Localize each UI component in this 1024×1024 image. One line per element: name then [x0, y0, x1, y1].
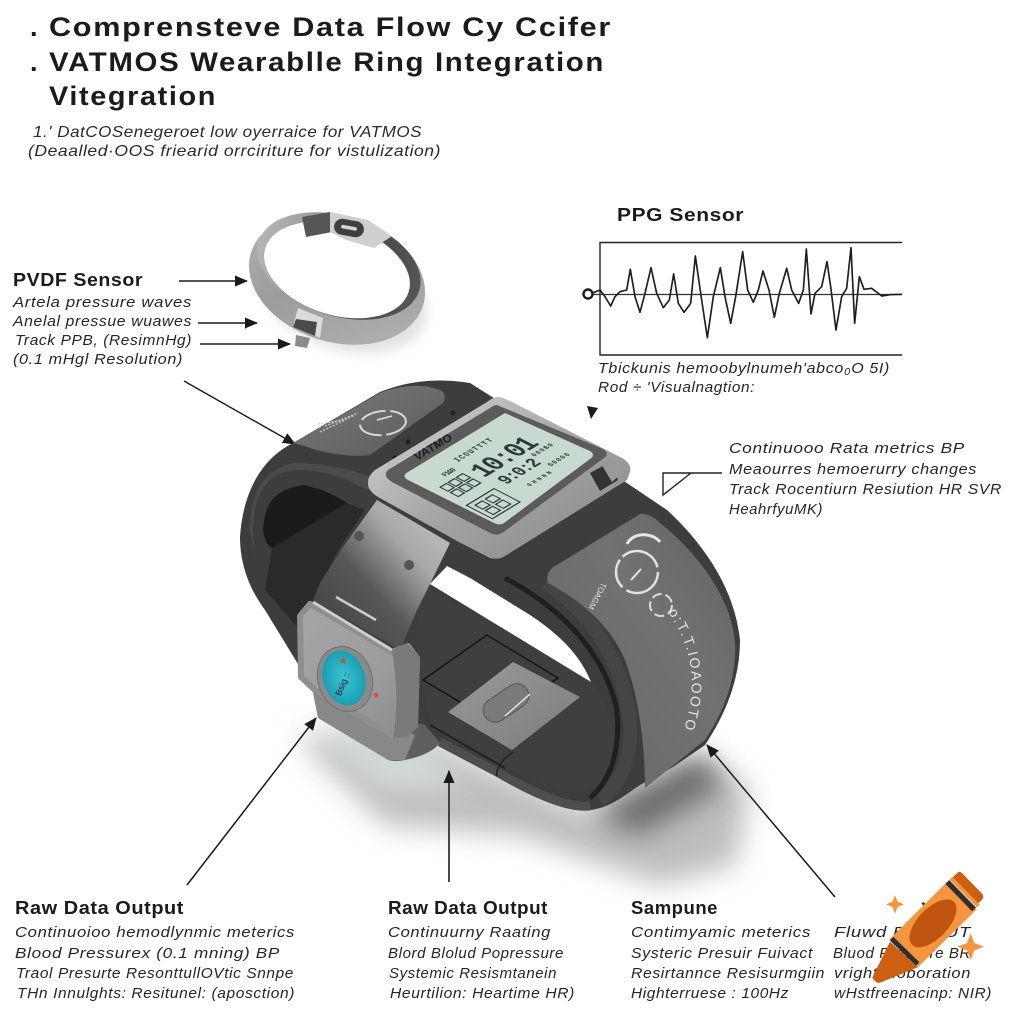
bottom column: raw data output 2 [388, 898, 575, 1002]
title: VATMOS Wearablle Ring Integration [49, 47, 605, 77]
right callout text: Continuooo Rata metrics BP [729, 440, 965, 457]
bottom column: sampune: Highterruese : 100Hz [631, 985, 789, 1002]
arrow: pressure waves to ring [198, 322, 257, 324]
right callout text: HeahrfyuMK) [729, 501, 823, 518]
top strap panel [293, 386, 456, 460]
left inner band [250, 463, 410, 630]
bottom column: sampune: Sampune [631, 898, 718, 918]
bottom column: sampune: Contimyamic meterics [631, 924, 811, 941]
bottom column: fluid: Fluwd Bre OUT [834, 924, 973, 941]
PVDF sensor callout: (0.1 mHgl Resolution) [13, 351, 183, 368]
subtitle: (Deaalled·OOS friearid orrciriture for vistulization) [28, 143, 441, 160]
opening behind the bracket [430, 566, 591, 682]
watch screen readout [417, 423, 586, 519]
bottom column: raw data output 1: THn Innulghts: Resitunel: (aposction) [17, 985, 295, 1002]
arrow: band panel [707, 745, 835, 897]
bottom column: raw data output 2: Blord Blolud Popressure [388, 945, 564, 962]
bottom column: raw data output 2: Raw Data Output [388, 898, 548, 918]
PVDF sensor callout: Anelal pressue wuawes [12, 313, 192, 330]
side sensor pod [300, 602, 440, 761]
bottom column: raw data output 2: Systemic Resismtanein [389, 965, 557, 982]
bottom column: raw data output 2: Heurtilion: Heartime HR) [390, 985, 575, 1002]
metal bracket [313, 500, 450, 650]
watch screen readout: 9:0:2 [494, 457, 548, 488]
arrow: pod [187, 718, 316, 885]
inner band floor [415, 582, 613, 793]
right callout leader [663, 473, 722, 495]
sensor door recess [423, 635, 558, 776]
watch module [368, 397, 630, 559]
PPG caption [598, 360, 890, 396]
bottom column: sampune: Systeric Presuir Fuivact [631, 945, 813, 962]
icon: crayon with sparkles [872, 872, 984, 983]
right callout text [729, 440, 1002, 518]
arrow: PVDF heading to ring [179, 280, 247, 282]
right band panel [547, 514, 736, 788]
title: . [30, 47, 39, 77]
PVDF sensor callout: PVDF Sensor [13, 270, 143, 290]
watch screen readout: 0HNNN [525, 470, 555, 487]
bottom column: raw data output 1: Raw Data Output [15, 898, 184, 918]
bottom column: fluid: Bluod Pressure BR [833, 945, 971, 962]
arrow: PPG marker [587, 406, 598, 419]
right callout text: Meaourres hemoerurry changes [729, 461, 977, 478]
bottom column: raw data output 1 [15, 898, 295, 1002]
bottom column: raw data output 1: Continuoioo hemodlynmic meterics [15, 924, 295, 941]
title: . [30, 12, 39, 42]
subtitle [28, 124, 441, 160]
side sensor pod: Bsig :: [333, 670, 352, 697]
subtitle: 1.' DatCOSenegeroet low oyerraice for VATMOS [33, 124, 422, 141]
watch screen readout: 10:01 [463, 433, 548, 482]
bottom column: fluid [833, 924, 992, 1002]
sensor plate [448, 662, 580, 750]
right callout text: Track Rocentiurn Resiution HR SVR [729, 481, 1002, 498]
arrow: resolution to ring clasp [200, 343, 290, 345]
bottom column: fluid: vrightsdoboration [834, 965, 971, 982]
PVDF sensor callout [12, 270, 192, 368]
bottom column: raw data output 1: Traol Presurte ResonttullOVtic Snnpe [16, 965, 294, 982]
PVDF sensor callout: Artela pressure waves [12, 294, 192, 311]
watch module: VATMO [412, 431, 455, 464]
PVDF ring illustration [233, 192, 441, 371]
bottom column: fluid: wHstfreenacinp: NIR) [834, 985, 992, 1002]
arrow: PVDF to band [184, 381, 295, 444]
PPG waveform chart [584, 242, 902, 355]
watch screen readout: F1G9 [441, 467, 460, 478]
band inner rim [440, 578, 630, 806]
watch screen readout: 000B0 [529, 442, 556, 458]
right band panel: o:T.T.IOAOOTO [670, 610, 702, 730]
bottom column: raw data output 2: Continuurny Raating [388, 924, 551, 941]
wearable device illustration [240, 380, 762, 897]
PVDF sensor callout: Track PPB, (ResimnHg) [15, 332, 192, 349]
watch screen readout: ICOUTTTT [452, 437, 497, 464]
title: Vitegration [49, 81, 217, 111]
right band panel: TOAGM [586, 581, 608, 611]
bottom column: sampune [631, 898, 825, 1002]
bottom column: raw data output 1: Blood Pressurex (0.1 mning) BP [15, 945, 280, 962]
PPG caption: Rod ÷ 'Visualnagtion: [598, 379, 755, 396]
PPG caption: Tbickunis hemoobylnumeh'abco₀O 5I) [598, 360, 890, 377]
title [30, 12, 612, 111]
band silhouette [240, 380, 740, 810]
PPG sensor heading: PPG Sensor [617, 205, 744, 225]
title: Comprensteve Data Flow Cy Ccifer [49, 12, 612, 42]
ground shadow [295, 730, 750, 885]
watch screen readout: G0000 [545, 452, 572, 467]
bottom column: sampune: Resirtannce Resisurmgiin [631, 965, 825, 982]
arrow: plate [448, 771, 450, 882]
